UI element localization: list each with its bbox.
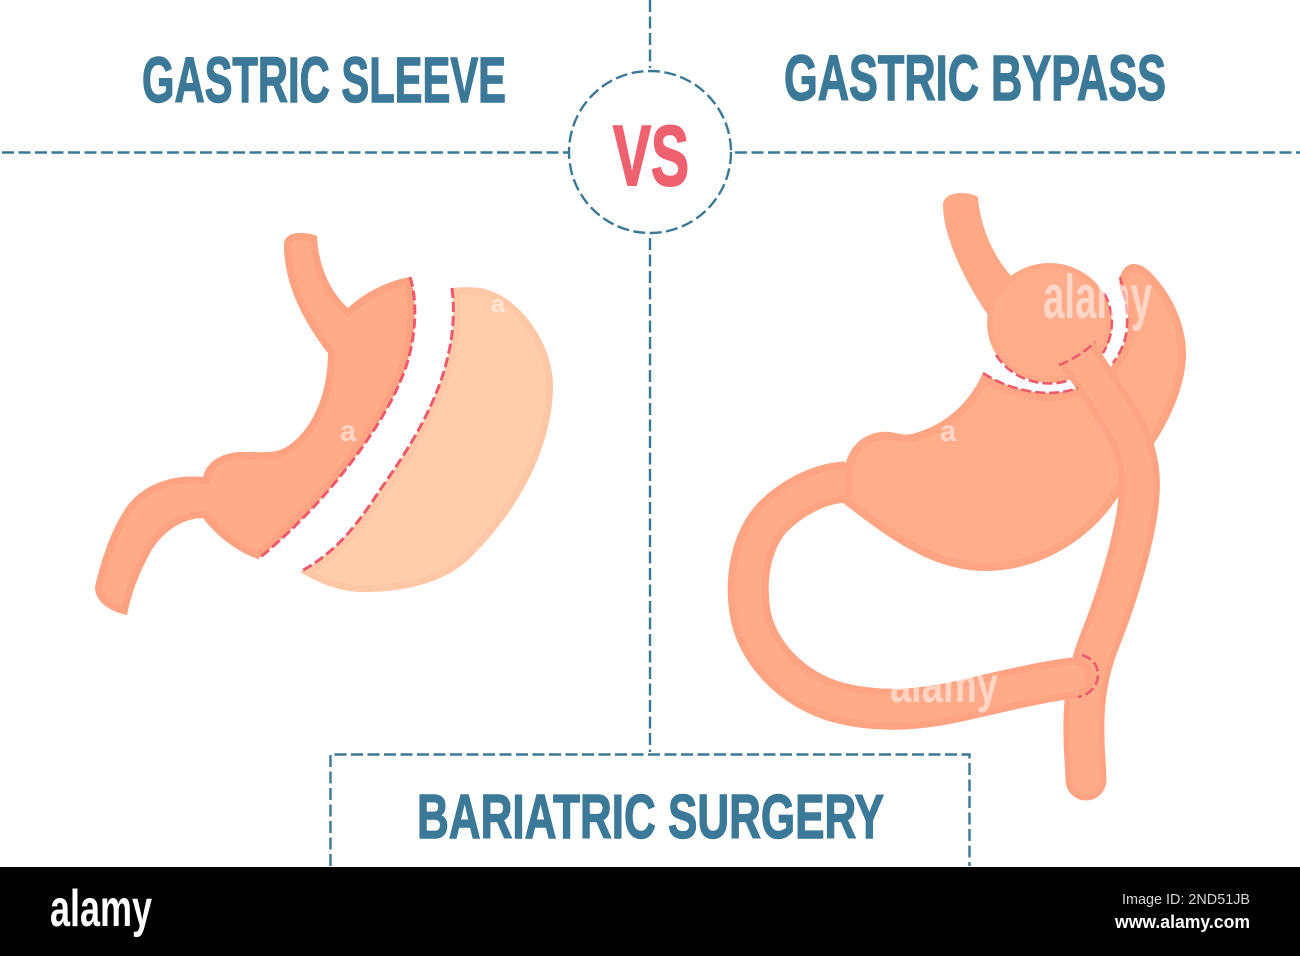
gastric pouch	[987, 263, 1112, 383]
roux limb	[1066, 354, 1139, 800]
watermarks: a	[491, 291, 506, 318]
footer url: www.alamy.com	[1114, 912, 1250, 932]
removed stomach portion	[300, 287, 553, 592]
surgical dashed lines	[983, 277, 1127, 697]
footer bar	[0, 867, 1300, 956]
watermarks: a	[340, 415, 356, 448]
title: gastric sleeve: GASTRIC SLEEVE	[142, 44, 506, 116]
illustration: gastric sleeve stomach	[95, 233, 553, 615]
dashed cut line: sleeve edge	[258, 277, 415, 559]
duodenal limb	[748, 482, 1094, 709]
title box label: bariatric surgery: BARIATRIC SURGERY	[417, 783, 884, 852]
watermarks	[340, 263, 1152, 713]
vs badge	[569, 71, 731, 233]
watermarks: a	[940, 415, 956, 448]
dashed cut line: removed portion edge	[300, 288, 453, 572]
retained sleeve portion	[95, 233, 415, 615]
illustration: gastric bypass	[748, 193, 1186, 800]
esophagus	[943, 193, 1012, 318]
footer image id: Image ID: 2ND51JB	[1122, 891, 1250, 908]
footer logo: alamy	[50, 880, 152, 938]
remnant stomach	[843, 264, 1186, 571]
watermarks: alamy	[1043, 263, 1152, 332]
watermarks: alamy	[890, 657, 998, 713]
vs badge: VS	[613, 109, 689, 204]
